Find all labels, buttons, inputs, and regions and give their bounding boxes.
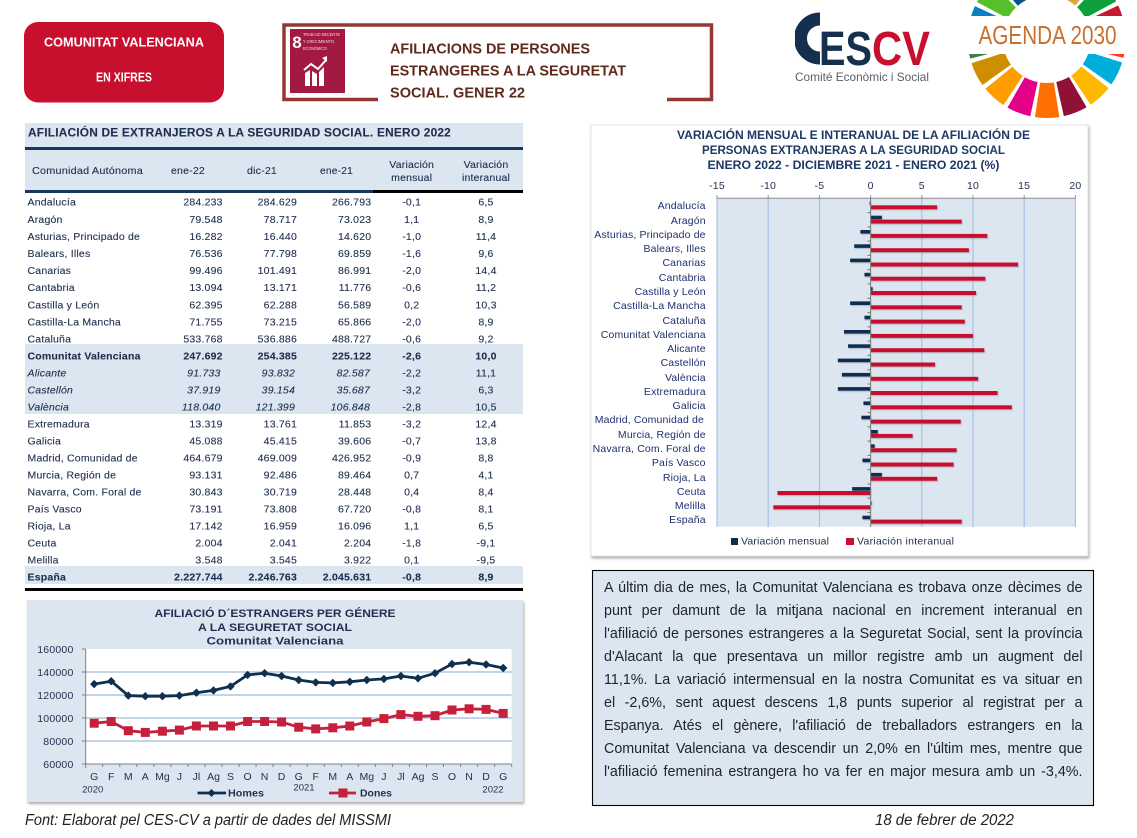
row: Comunitat Valenciana: Comunitat Valenciana bbox=[28, 351, 141, 363]
x axis labels: 2020 bbox=[82, 784, 103, 796]
row: València: -2,8 bbox=[402, 402, 421, 414]
legend: Dones: Dones bbox=[360, 788, 392, 800]
row: País Vasco: -0,8 bbox=[402, 504, 421, 516]
row: Extremadura: -3,2 bbox=[402, 419, 421, 431]
source note: Font: Elaborat pel CES-CV a partir de dades del MISSMI bbox=[25, 812, 392, 829]
row: Navarra: 30.843 bbox=[189, 487, 223, 499]
row: Aragón: 73.023 bbox=[338, 214, 371, 226]
row: Ceuta: 2.004 bbox=[195, 538, 223, 550]
category labels: València bbox=[665, 372, 706, 384]
x axis labels: O bbox=[244, 771, 252, 783]
row: Extremadura: 12,4 bbox=[475, 419, 497, 431]
row: Canarias: -2,0 bbox=[402, 265, 421, 277]
row: Navarra: 8,4 bbox=[478, 487, 494, 499]
title text bbox=[390, 40, 626, 102]
row: Navarra: 28.448 bbox=[338, 487, 371, 499]
row: Madrid: 8,8 bbox=[478, 453, 494, 465]
row: Asturias: 11,4 bbox=[476, 231, 496, 243]
row: Canarias: 14,4 bbox=[475, 265, 497, 277]
row: Canarias: 101.491 bbox=[258, 265, 297, 277]
x axis labels: S bbox=[431, 771, 439, 783]
row: España: España bbox=[28, 572, 66, 584]
row: Madrid: Madrid, Comunidad de bbox=[28, 453, 138, 465]
row: Rioja: 16.959 bbox=[264, 521, 297, 533]
row: Madrid: 469.009 bbox=[258, 453, 297, 465]
row: Melilla: 3.545 bbox=[270, 555, 297, 567]
category labels bbox=[593, 200, 706, 526]
category labels: Alicante bbox=[667, 343, 706, 355]
header frame with title bbox=[284, 25, 712, 102]
row: Cantabria: 11.776 bbox=[339, 282, 371, 294]
row: Madrid bbox=[28, 453, 494, 465]
summary paragraph: l'afiliació de persones estrangeres a la Seguretat Social, sent la província bbox=[604, 626, 1082, 642]
row: Balears: 77.798 bbox=[264, 248, 297, 260]
row: Aragón: Aragón bbox=[28, 214, 63, 226]
category labels: Castilla-La Mancha bbox=[613, 300, 706, 312]
category labels: Cataluña bbox=[662, 315, 706, 327]
row: Asturias: 16.282 bbox=[189, 231, 223, 243]
chart: monthly and yearly variation bars bbox=[591, 125, 1088, 556]
row: Comunitat Valenciana: 225.122 bbox=[332, 351, 371, 363]
row: Castilla y León: 62.395 bbox=[189, 300, 223, 312]
top axis labels: -15 bbox=[709, 180, 725, 192]
x axis labels: F bbox=[108, 771, 114, 783]
row: Balears: 76.536 bbox=[189, 248, 223, 260]
row: Aragón: 1,1 bbox=[404, 214, 419, 226]
bar chart legend: Variación mensual bbox=[741, 536, 829, 548]
x axis labels: N bbox=[261, 771, 268, 783]
row: Murcia: 92.486 bbox=[264, 470, 297, 482]
row: Galicia: 45.415 bbox=[264, 436, 297, 448]
row: Cantabria: Cantabria bbox=[28, 282, 75, 294]
row: Asturias: 14.620 bbox=[338, 231, 371, 243]
row: Melilla: 3.922 bbox=[344, 555, 371, 567]
row: Cataluña: 9,2 bbox=[478, 334, 494, 346]
summary paragraph: Comunitat Valenciana va descendir un 2,0% en l'últim mes, mentre que bbox=[604, 741, 1082, 757]
summary paragraph: el -2,6%, sent aquest descens 1,8 punts superior al registrat per a bbox=[604, 695, 1082, 711]
row: Aragón: 79.548 bbox=[189, 214, 223, 226]
row: España: 2.246.763 bbox=[248, 572, 297, 584]
badge: Comunitat Valenciana en xifres: EN XIFRES bbox=[96, 70, 152, 84]
x axis labels: A bbox=[142, 771, 149, 783]
table header row: dic-21 bbox=[247, 165, 277, 177]
series: Homes bbox=[94, 662, 503, 696]
table header row: Variación bbox=[464, 159, 508, 171]
bar chart legend: Variación interanual bbox=[857, 536, 954, 548]
chart title: AFILIACIÓ D´ESTRANGERS PER GÉNERE bbox=[154, 607, 396, 620]
row: Rioja: 17.142 bbox=[189, 521, 223, 533]
x axis labels: N bbox=[465, 771, 473, 783]
row: Murcia: 4,1 bbox=[478, 470, 494, 482]
row: Rioja: 16.096 bbox=[338, 521, 371, 533]
row: Castilla-La Mancha: 8,9 bbox=[478, 316, 494, 328]
x axis labels: Jl bbox=[193, 771, 200, 783]
row: Extremadura: 11.853 bbox=[339, 419, 371, 431]
row: Galicia: -0,7 bbox=[402, 436, 421, 448]
logo: CES CV: ES bbox=[819, 23, 872, 76]
row: Comunitat Valenciana bbox=[28, 351, 497, 363]
row: Extremadura: 13.761 bbox=[264, 419, 297, 431]
bar chart title: ENERO 2022 - DICIEMBRE 2021 - ENERO 2021 (%) bbox=[708, 160, 1000, 172]
row: Alicante bbox=[26, 368, 496, 380]
row: Andalucía: 6,5 bbox=[478, 197, 494, 209]
legend: Dones bbox=[329, 788, 392, 800]
row: Galicia bbox=[28, 436, 497, 448]
summary paragraph: d'Alacant la que presentava un millor registre amb un augment del bbox=[604, 649, 1082, 665]
row: Navarra: 0,4 bbox=[404, 487, 419, 499]
category labels: España bbox=[669, 514, 706, 526]
logo: CES CV: CV bbox=[872, 23, 930, 76]
x axis labels: Jl bbox=[397, 771, 405, 783]
row: Alicante: -2,2 bbox=[402, 368, 421, 380]
icon: SDG 8 decent work: TRABAJO DECENTE bbox=[303, 32, 340, 37]
row: Castilla-La Mancha: 73.215 bbox=[264, 316, 297, 328]
row: Castilla y León bbox=[28, 300, 497, 312]
icon: SDG 8 decent work: 8 bbox=[292, 33, 302, 52]
x axis labels: G bbox=[499, 771, 507, 783]
y axis labels: 160000 bbox=[37, 644, 74, 656]
icon: SDG 8 decent work bbox=[290, 29, 345, 93]
category labels: Cantabria bbox=[659, 272, 706, 284]
top axis labels: 15 bbox=[1018, 180, 1030, 192]
legend: Homes bbox=[198, 788, 264, 800]
top axis labels: 0 bbox=[868, 180, 874, 192]
row: Castellón bbox=[28, 385, 494, 397]
row: Ceuta: 2.041 bbox=[270, 538, 297, 550]
row: Castilla-La Mancha: -2,0 bbox=[402, 316, 421, 328]
row: Murcia: 93.131 bbox=[189, 470, 223, 482]
row: Asturias: Asturias, Principado de bbox=[28, 231, 140, 243]
row: Navarra: Navarra, Com. Foral de bbox=[28, 487, 142, 499]
row: Cataluña: -0,6 bbox=[402, 334, 421, 346]
row: Galicia: Galicia bbox=[28, 436, 61, 448]
date: 18 de febrer de 2022 bbox=[875, 812, 1014, 829]
row: Andalucía: 284.629 bbox=[258, 197, 297, 209]
row: Cataluña: Cataluña bbox=[28, 334, 71, 346]
summary paragraph: l'afiliació femenina estrangera ho va fer en major mesura amb un -3,4%. bbox=[604, 764, 1082, 780]
table header row: interanual bbox=[462, 172, 510, 184]
table title: AFILIACIÓN DE EXTRANJEROS A LA SEGURIDAD SOCIAL. ENERO 2022 bbox=[28, 126, 451, 140]
row: Galicia: 45.088 bbox=[189, 436, 223, 448]
x axis labels: G bbox=[90, 771, 98, 783]
x axis labels: M bbox=[124, 771, 133, 783]
bar chart title bbox=[677, 129, 1030, 172]
row: Cataluña: 536.886 bbox=[258, 334, 297, 346]
row: Castilla y León: 62.288 bbox=[264, 300, 297, 312]
y axis labels bbox=[37, 644, 74, 771]
row: Galicia: 39.606 bbox=[338, 436, 371, 448]
row: Canarias bbox=[28, 265, 497, 277]
top axis labels: 10 bbox=[967, 180, 979, 192]
row: Madrid: -0,9 bbox=[402, 453, 421, 465]
category labels: Navarra, Com. Foral de bbox=[593, 443, 706, 455]
row: Balears: -1,6 bbox=[402, 248, 421, 260]
chart title: A LA SEGURETAT SOCIAL bbox=[198, 622, 352, 634]
row: Andalucía bbox=[28, 197, 494, 209]
chart: gender line chart bbox=[27, 600, 523, 802]
row: Melilla bbox=[28, 555, 495, 567]
logo: Agenda 2030 wheel bbox=[960, 0, 1137, 126]
category labels: Rioja, La bbox=[663, 472, 706, 484]
y axis labels: 100000 bbox=[37, 713, 74, 725]
row: València bbox=[28, 402, 497, 414]
title text: AFILIACIONS DE PERSONES bbox=[390, 40, 590, 58]
row: País Vasco: 8,1 bbox=[478, 504, 494, 516]
x axis labels: D bbox=[482, 771, 490, 783]
row: Cantabria bbox=[28, 282, 496, 294]
x axis labels: Mg bbox=[360, 771, 374, 783]
category labels: Melilla bbox=[675, 500, 706, 512]
table header row: ene-22 bbox=[171, 165, 205, 177]
x axis labels: J bbox=[177, 771, 182, 783]
row: Castilla y León: 10,3 bbox=[475, 300, 497, 312]
top axis labels: -5 bbox=[815, 180, 824, 192]
row: Castilla y León: Castilla y León bbox=[28, 300, 99, 312]
x axis labels: M bbox=[328, 771, 337, 783]
category labels: Canarias bbox=[662, 257, 706, 269]
row: Andalucía: -0,1 bbox=[402, 197, 421, 209]
row: Navarra bbox=[28, 487, 494, 499]
row: València: 10,5 bbox=[475, 402, 497, 414]
chart title: Comunitat Valenciana bbox=[206, 636, 345, 648]
row: Castilla-La Mancha: 65.866 bbox=[338, 316, 371, 328]
category labels: Andalucía bbox=[658, 200, 706, 212]
table header row: Comunidad Autónoma bbox=[32, 165, 143, 177]
row: España: 2.227.744 bbox=[174, 572, 223, 584]
row: País Vasco bbox=[28, 504, 494, 516]
row: País Vasco: 73.191 bbox=[189, 504, 223, 516]
row: Navarra: 30.719 bbox=[264, 487, 297, 499]
row: Alicante: 93.832 bbox=[262, 368, 295, 380]
top axis labels: 20 bbox=[1069, 180, 1081, 192]
category labels: Castilla y León bbox=[635, 286, 706, 298]
row: Ceuta: -9,1 bbox=[477, 538, 495, 550]
bar chart title: VARIACIÓN MENSUAL E INTERANUAL DE LA AFILIACIÓN DE bbox=[677, 129, 1030, 142]
row: Castellón: 6,3 bbox=[478, 385, 494, 397]
row: Andalucía: Andalucía bbox=[28, 197, 76, 209]
top axis labels: -10 bbox=[760, 180, 776, 192]
row: Murcia: 0,7 bbox=[404, 470, 419, 482]
row: Castellón: 39.154 bbox=[262, 385, 295, 397]
row: Castilla y León: 0,2 bbox=[404, 300, 419, 312]
row: Extremadura: Extremadura bbox=[28, 419, 90, 431]
row: Canarias: 86.991 bbox=[338, 265, 371, 277]
series: Dones bbox=[94, 709, 503, 732]
row: Murcia bbox=[28, 470, 494, 482]
table header row: Variación bbox=[389, 159, 434, 171]
row: Melilla: Melilla bbox=[28, 555, 59, 567]
category labels: Madrid, Comunidad de bbox=[595, 414, 704, 426]
row: Rioja bbox=[28, 521, 494, 533]
row: País Vasco: 67.720 bbox=[338, 504, 371, 516]
category labels: Comunitat Valenciana bbox=[601, 329, 706, 341]
category labels: Aragón bbox=[671, 215, 706, 227]
row: Alicante: 11,1 bbox=[476, 368, 496, 380]
row: Alicante: 82.587 bbox=[337, 368, 371, 380]
summary paragraph: 11,1%. La variació intermensual en la nostra Comunitat es va situar en bbox=[604, 672, 1082, 688]
row: Comunitat Valenciana: 247.692 bbox=[183, 351, 223, 363]
row: Comunitat Valenciana: 10,0 bbox=[475, 351, 497, 363]
category labels: Extremadura bbox=[644, 386, 706, 398]
row: Canarias: Canarias bbox=[28, 265, 71, 277]
x axis labels: G bbox=[295, 771, 303, 783]
row: España: -0,8 bbox=[402, 572, 421, 584]
x axis labels: F bbox=[312, 771, 319, 783]
x axis labels: Ag bbox=[412, 771, 425, 783]
table header row: mensual bbox=[391, 172, 432, 184]
icon: SDG 8 decent work: ECONÓMICO bbox=[303, 45, 327, 51]
row: Alicante: Alicante bbox=[26, 368, 66, 380]
row: Galicia: 13,8 bbox=[475, 436, 497, 448]
row: España: 2.045.631 bbox=[323, 572, 371, 584]
row: Aragón: 78.717 bbox=[264, 214, 297, 226]
row: València: 106.848 bbox=[331, 402, 370, 414]
row: Melilla: 3.548 bbox=[195, 555, 223, 567]
x axis labels: Mg bbox=[155, 771, 170, 783]
row: Cataluña: 533.768 bbox=[183, 334, 223, 346]
row: Rioja: 1,1 bbox=[404, 521, 419, 533]
row: Asturias: 16.440 bbox=[264, 231, 297, 243]
legend: Homes: Homes bbox=[228, 788, 264, 800]
row: València: 121.399 bbox=[256, 402, 295, 414]
x axis labels: S bbox=[227, 771, 234, 783]
row: Comunitat Valenciana: 254.385 bbox=[258, 351, 297, 363]
row: Castilla y León: 56.589 bbox=[338, 300, 371, 312]
row: Castilla-La Mancha: Castilla-La Mancha bbox=[28, 316, 121, 328]
y axis labels: 140000 bbox=[37, 667, 74, 679]
row: Castellón: 37.919 bbox=[187, 385, 220, 397]
y axis labels: 80000 bbox=[43, 736, 74, 748]
row: Cantabria: -0,6 bbox=[402, 282, 421, 294]
x axis labels: 2022 bbox=[482, 784, 504, 796]
row: País Vasco: País Vasco bbox=[28, 504, 82, 516]
row: España: 8,9 bbox=[478, 572, 494, 584]
bars: variació interanual bbox=[773, 205, 1018, 524]
category labels: País Vasco bbox=[652, 457, 706, 469]
category labels: Asturias, Principado de bbox=[594, 229, 706, 241]
row: Castellón: Castellón bbox=[28, 385, 73, 397]
category labels: Murcia, Región de bbox=[618, 429, 706, 441]
summary paragraph bbox=[604, 580, 1082, 780]
row: Ceuta: -1,8 bbox=[402, 538, 421, 550]
x axis labels: O bbox=[448, 771, 456, 783]
text box background bbox=[592, 570, 1094, 806]
row: València: València bbox=[28, 402, 69, 414]
y axis labels: 120000 bbox=[37, 690, 74, 702]
badge: Comunitat Valenciana en xifres bbox=[24, 22, 224, 102]
top axis labels bbox=[709, 180, 1081, 192]
row: Asturias: -1,0 bbox=[402, 231, 421, 243]
row: Asturias bbox=[28, 231, 496, 243]
table header row: ene-21 bbox=[320, 165, 353, 177]
row: Alicante: 91.733 bbox=[187, 368, 220, 380]
row: Cantabria: 11,2 bbox=[476, 282, 496, 294]
row: Melilla: 0,1 bbox=[404, 555, 419, 567]
logo: CES CV: Comité Econòmic i Social bbox=[795, 70, 929, 84]
row: Aragón: 8,9 bbox=[478, 214, 494, 226]
top axis labels: 5 bbox=[919, 180, 925, 192]
bar chart title: PERSONAS EXTRANJERAS A LA SEGURIDAD SOCIAL bbox=[702, 145, 1005, 157]
y axis labels: 60000 bbox=[43, 759, 74, 771]
row: Canarias: 99.496 bbox=[189, 265, 223, 277]
row: Rioja: Rioja, La bbox=[28, 521, 71, 533]
badge: Comunitat Valenciana en xifres: COMUNITAT VALENCIANA bbox=[44, 36, 204, 50]
row: Cataluña: 488.727 bbox=[332, 334, 371, 346]
row: Castellón: -3,2 bbox=[402, 385, 421, 397]
chart title bbox=[154, 607, 396, 648]
row: Rioja: 6,5 bbox=[478, 521, 494, 533]
row: Andalucía: 284.233 bbox=[183, 197, 223, 209]
row: Balears bbox=[28, 248, 494, 260]
row: Madrid: 464.679 bbox=[183, 453, 223, 465]
row: Melilla: -9,5 bbox=[477, 555, 495, 567]
x axis labels: Ag bbox=[207, 771, 220, 783]
x axis labels: A bbox=[346, 771, 353, 783]
row: Castilla-La Mancha: 71.755 bbox=[189, 316, 223, 328]
row: España bbox=[28, 572, 494, 584]
table: foreign affiliation by region bbox=[25, 123, 523, 591]
bar chart legend bbox=[731, 536, 954, 548]
row: València: 118.040 bbox=[182, 402, 220, 414]
row: Balears: 69.859 bbox=[338, 248, 371, 260]
table header row bbox=[32, 159, 510, 184]
row: Ceuta: 2.204 bbox=[344, 538, 371, 550]
summary paragraph: A últim dia de mes, la Comunitat Valenciana es trobava onze dècimes de bbox=[604, 580, 1082, 596]
category labels: Ceuta bbox=[677, 486, 706, 498]
row: Ceuta bbox=[28, 538, 495, 550]
logo: CES CV bbox=[780, 5, 930, 84]
row: Comunitat Valenciana: -2,6 bbox=[402, 351, 421, 363]
x axis labels: 2021 bbox=[293, 782, 315, 794]
category labels: Balears, Illes bbox=[643, 243, 706, 255]
bars: variació mensual bbox=[838, 201, 882, 519]
row: Cantabria: 13.094 bbox=[189, 282, 223, 294]
title text: ESTRANGERES A LA SEGURETAT bbox=[390, 62, 626, 80]
row: Murcia: 89.464 bbox=[338, 470, 371, 482]
x axis labels bbox=[82, 771, 507, 796]
row: Cantabria: 13.171 bbox=[264, 282, 297, 294]
category labels: Galicia bbox=[673, 400, 706, 412]
category labels: Castellón bbox=[661, 357, 706, 369]
row: Cataluña bbox=[28, 334, 494, 346]
row: Balears: 9,6 bbox=[478, 248, 494, 260]
row: Murcia: Murcia, Región de bbox=[28, 470, 116, 482]
title text: SOCIAL. GENER 22 bbox=[390, 84, 525, 102]
icon: SDG 8 decent work: Y CRECIMIENTO bbox=[303, 39, 334, 44]
summary paragraph: Espanya. Atés el gènere, l'afiliació de treballadors estrangers en la bbox=[604, 718, 1082, 734]
row: Extremadura bbox=[28, 419, 497, 431]
row: Castellón: 35.687 bbox=[337, 385, 371, 397]
row: Castilla-La Mancha bbox=[28, 316, 494, 328]
row: País Vasco: 73.808 bbox=[264, 504, 297, 516]
row: Andalucía: 266.793 bbox=[332, 197, 371, 209]
row: Aragón bbox=[28, 214, 494, 226]
x axis labels: J bbox=[381, 771, 387, 783]
x axis labels: D bbox=[278, 771, 286, 783]
row: Extremadura: 13.319 bbox=[189, 419, 223, 431]
row: Balears: Balears, Illes bbox=[28, 248, 90, 260]
row: Madrid: 426.952 bbox=[332, 453, 371, 465]
summary paragraph: punt per damunt de la mitjana nacional en increment interanual en bbox=[604, 603, 1082, 619]
row: Ceuta: Ceuta bbox=[28, 538, 57, 550]
